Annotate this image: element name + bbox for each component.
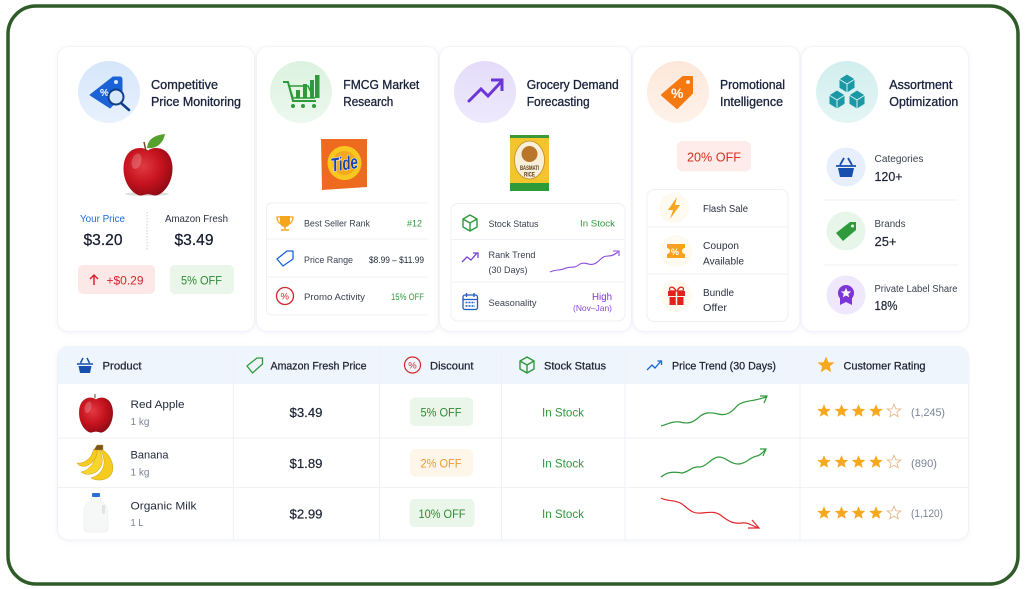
image: Tide box xyxy=(321,139,367,190)
row: organic milk: In Stock xyxy=(542,507,585,521)
badge: price difference xyxy=(78,265,155,294)
heading xyxy=(889,78,958,109)
price comparison: Amazon Fresh xyxy=(165,213,228,225)
badge: 20% off: 20% OFF xyxy=(687,150,741,164)
row: banana xyxy=(77,445,937,480)
metrics table xyxy=(451,204,625,321)
rating: (890) xyxy=(911,458,937,470)
row: red apple: Red Apple xyxy=(130,399,184,411)
metrics table: High xyxy=(592,292,612,303)
badge: 20% off xyxy=(677,141,751,172)
table header: Price Trend (30 Days) xyxy=(672,360,776,372)
icon: trophy xyxy=(277,216,293,230)
badge xyxy=(410,449,473,476)
table header: Stock Status xyxy=(544,360,606,372)
metrics table: #12 xyxy=(407,218,422,230)
sparkline: up xyxy=(661,396,767,426)
heading: Promotional xyxy=(720,78,785,92)
icon: price tag with magnifier xyxy=(78,61,140,123)
row: organic milk: $2.99 xyxy=(290,506,322,522)
icon: cube xyxy=(463,215,477,231)
icon: price tag with magnifier: % xyxy=(100,88,109,99)
table header: Customer Rating xyxy=(844,360,926,372)
image: red apple xyxy=(124,134,172,196)
row: organic milk: Organic Milk xyxy=(130,500,197,512)
badge: 2% OFF xyxy=(420,456,462,470)
price comparison: Your Price xyxy=(80,213,125,225)
icon: calendar xyxy=(463,293,478,310)
metrics table: Stock Status xyxy=(488,219,539,230)
stat: categories: Categories xyxy=(874,154,924,165)
icon: star xyxy=(818,356,834,372)
heading: Assortment xyxy=(889,78,953,92)
sparkline: down xyxy=(661,498,759,528)
icon: percent circle: % xyxy=(280,292,290,302)
table header: Product xyxy=(102,360,142,372)
heading xyxy=(720,78,785,109)
promo list: Available xyxy=(703,256,744,268)
icon: price tag xyxy=(277,251,293,266)
panel: promotional intelligence xyxy=(633,46,800,332)
badge: 5% OFF xyxy=(420,406,462,420)
badge: discount: 5% OFF xyxy=(181,274,222,288)
icon: orange percent tag: % xyxy=(671,85,684,101)
icon: orange percent tag xyxy=(647,61,709,123)
panel: grocery demand forecasting xyxy=(440,46,632,332)
heading: Research xyxy=(343,95,393,109)
image: Tide box: Tide xyxy=(330,152,360,177)
icon: tag xyxy=(247,358,262,373)
price comparison: $3.49 xyxy=(174,232,214,249)
heading xyxy=(343,78,420,109)
metrics table xyxy=(266,203,428,315)
stat: brands: Brands xyxy=(874,219,906,230)
metrics table: Seasonality xyxy=(488,298,537,309)
table header xyxy=(58,346,968,384)
stat: categories: 120+ xyxy=(874,169,902,184)
heading: Price Monitoring xyxy=(151,95,241,109)
icon: rank trend xyxy=(462,253,478,262)
promo list xyxy=(647,190,788,322)
promo list: Flash Sale xyxy=(703,204,748,215)
heading: Optimization xyxy=(889,95,958,109)
promo list: Bundle xyxy=(703,288,734,299)
row: red apple: $3.49 xyxy=(290,405,322,420)
icon: coupon xyxy=(660,235,692,267)
heading xyxy=(527,78,619,109)
icon: coupon: % xyxy=(671,247,679,257)
stat: private label share: 18% xyxy=(874,298,898,313)
rating xyxy=(817,455,937,470)
metrics table: Promo Activity xyxy=(304,292,365,303)
heading: Competitive xyxy=(151,78,218,92)
row: organic milk xyxy=(84,493,943,532)
icon: percent xyxy=(404,357,420,373)
metrics table: $8.99 – $11.99 xyxy=(369,255,424,266)
stat: brands: 25+ xyxy=(874,234,896,249)
image: apple xyxy=(79,394,113,433)
row: red apple: 1 kg xyxy=(130,416,150,428)
row: red apple xyxy=(79,394,945,433)
metrics table: Price Range xyxy=(304,255,353,266)
badge xyxy=(410,398,473,426)
panel: competitive price monitoring xyxy=(58,46,254,332)
icon: trend xyxy=(647,361,662,370)
metrics table: 15% OFF xyxy=(391,292,424,303)
heading: Intelligence xyxy=(720,95,783,109)
row: organic milk: 1 L xyxy=(130,517,144,529)
image: basmati rice bag xyxy=(510,135,549,191)
metrics table: (Nov–Jan) xyxy=(573,303,612,313)
sparkline: up xyxy=(661,449,766,477)
panel: assortment optimization xyxy=(802,46,968,332)
image: banana bunch xyxy=(77,445,113,480)
badge: 10% OFF xyxy=(418,507,466,521)
icon: percent: % xyxy=(408,360,417,372)
image: basmati rice bag: BASMATI xyxy=(520,166,539,172)
image: milk jug xyxy=(84,493,108,532)
rating xyxy=(817,404,945,419)
badge: price difference: +$0.29 xyxy=(106,274,144,288)
image: basmati rice bag: RICE xyxy=(524,172,535,178)
row: banana: Banana xyxy=(130,450,169,462)
table header: Discount xyxy=(430,360,474,372)
metrics table: Best Seller Rank xyxy=(304,218,370,230)
heading: Forecasting xyxy=(527,95,590,109)
heading: FMCG Market xyxy=(343,78,420,92)
row: banana: 1 kg xyxy=(130,466,150,478)
price comparison xyxy=(80,212,228,250)
price comparison: $3.20 xyxy=(84,232,123,249)
panel: FMCG market research xyxy=(256,46,438,332)
stat: categories xyxy=(826,148,924,186)
heading xyxy=(151,78,241,109)
rating: (1,120) xyxy=(911,508,943,520)
stat: private label share xyxy=(826,276,958,314)
stat: private label share: Private Label Share xyxy=(874,284,958,295)
badge: discount xyxy=(170,265,234,294)
rating xyxy=(817,506,943,520)
icon: gift xyxy=(660,280,692,312)
promo list: Offer xyxy=(703,303,728,314)
icon: basket xyxy=(77,358,93,373)
row: red apple: In Stock xyxy=(542,406,585,420)
metrics table: (30 Days) xyxy=(488,265,528,276)
metrics table: Rank Trend xyxy=(488,250,536,261)
table header: Amazon Fresh Price xyxy=(270,360,366,372)
icon: flash sale xyxy=(659,193,689,223)
promo list: Coupon xyxy=(703,241,739,252)
product table xyxy=(58,346,968,540)
metrics table: In Stock xyxy=(580,218,615,230)
row: banana: $1.89 xyxy=(290,456,322,471)
icon: cart with bars xyxy=(270,61,332,123)
row: banana: In Stock xyxy=(542,456,585,470)
icon: three cubes xyxy=(816,61,878,123)
icon: percent circle xyxy=(276,288,294,304)
heading: Grocery Demand xyxy=(527,78,619,92)
stat: brands xyxy=(826,212,906,250)
icon: cube xyxy=(520,357,534,373)
badge xyxy=(410,499,474,527)
sparkline: rank trend xyxy=(550,251,619,272)
rating: (1,245) xyxy=(911,407,945,419)
icon: trend arrow xyxy=(454,61,516,123)
